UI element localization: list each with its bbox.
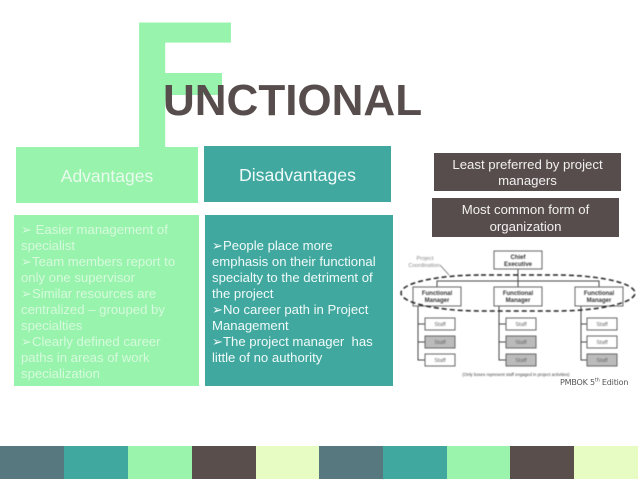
panel: disadvantages list	[205, 215, 393, 386]
org chart diagram: Functional	[584, 291, 614, 297]
panel: disadvantages list: ➢No career path in Project Management	[212, 302, 368, 333]
org chart diagram: (Only boxes represent staff engaged in project activities)	[462, 372, 570, 377]
org chart diagram: Project	[416, 256, 434, 262]
org chart diagram	[400, 250, 636, 378]
org chart diagram: Coordination	[408, 263, 440, 269]
panel: disadvantages heading: Disadvantages	[239, 164, 356, 184]
org chart diagram: Staff	[596, 340, 608, 346]
org chart diagram: Staff	[434, 358, 446, 364]
org chart diagram: Staff	[515, 322, 527, 328]
panel: advantages list: ➢Team members report to only one supervisor	[21, 254, 175, 285]
panel: advantages list	[14, 215, 199, 386]
org chart diagram: Manager	[425, 298, 450, 304]
callout: least preferred	[434, 153, 621, 191]
source note: PMBOK 5th Edition	[560, 377, 628, 387]
org chart diagram: Functional	[503, 291, 533, 297]
panel: advantages list: ➢Clearly defined career paths in areas of work specialization	[21, 334, 161, 381]
org chart diagram: Staff	[434, 340, 446, 346]
panel: advantages list: ➢Similar resources are centralized – grouped by specialties	[21, 286, 165, 333]
panel: advantages heading: Advantages	[61, 166, 153, 186]
panel: advantages list: ➢ Easier management of specialist	[21, 222, 168, 253]
org chart diagram: Staff	[596, 358, 608, 364]
panel: disadvantages heading	[204, 146, 391, 202]
callout: least preferred: Least preferred by project managers	[452, 157, 603, 188]
org chart diagram: Executive	[504, 262, 533, 268]
org chart diagram: Staff	[515, 340, 527, 346]
panel: disadvantages list: ➢People place more emphasis on their functional specialty to the detriment of the project	[212, 238, 376, 301]
org chart diagram: Manager	[506, 298, 531, 304]
callout: most common	[432, 198, 619, 237]
org chart diagram: Functional	[422, 291, 452, 297]
callout: most common: Most common form of organization	[462, 202, 589, 234]
org chart diagram: Staff	[596, 322, 608, 328]
org chart diagram: Staff	[515, 358, 527, 364]
org chart diagram: Chief	[510, 255, 527, 261]
footer colour strip	[0, 446, 638, 479]
title: UNCTIONAL	[163, 76, 422, 125]
org chart diagram: Manager	[587, 298, 612, 304]
org chart diagram: Staff	[434, 322, 446, 328]
panel: disadvantages list: ➢The project manager has little of no authority	[212, 334, 373, 365]
panel: advantages heading	[16, 147, 198, 203]
